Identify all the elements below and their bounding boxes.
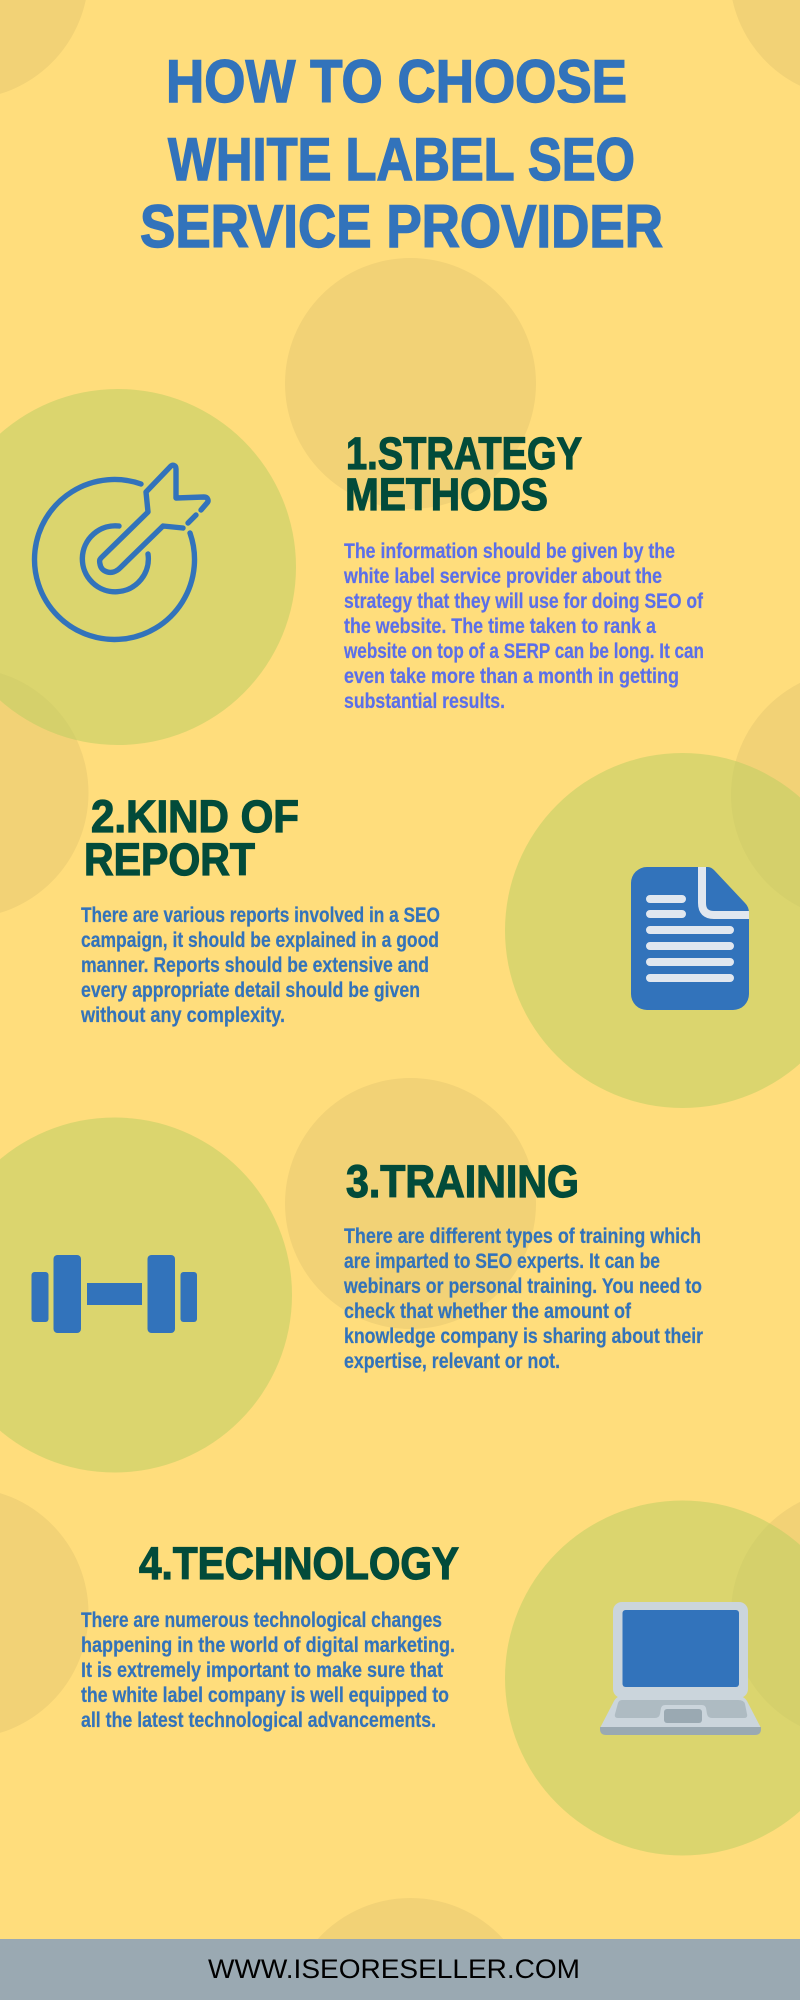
- text: strategy methods: substantial results.: [344, 690, 505, 713]
- heading: technology: 4.TECHNOLOGY: [139, 1538, 459, 1589]
- text: kind of report: There are various reports involved in a SEO: [81, 904, 440, 927]
- heading: kind of report: [84, 791, 299, 885]
- heading: kind of report: REPORT: [84, 834, 255, 885]
- text: strategy methods: The information should be given by the: [344, 540, 675, 563]
- text: training: There are different types of training which: [344, 1225, 701, 1248]
- text: strategy methods: the website. The time taken to rank a: [344, 615, 656, 638]
- heading: strategy methods: [345, 428, 582, 520]
- text: technology: happening in the world of digital marketing.: [81, 1634, 455, 1657]
- text: strategy methods: even take more than a month in getting: [344, 665, 679, 688]
- text: strategy methods: strategy that they will use for doing SEO of: [344, 590, 704, 613]
- text: training: [343, 1225, 703, 1373]
- text: kind of report: manner. Reports should be extensive and: [81, 954, 429, 977]
- text: kind of report: every appropriate detail should be given: [81, 979, 420, 1002]
- text: strategy methods: [343, 540, 704, 713]
- icon: target with arrow: [35, 465, 208, 639]
- text: training: are imparted to SEO experts. It can be: [344, 1250, 660, 1273]
- heading: training: 3.TRAINING: [346, 1156, 579, 1207]
- title: SERVICE PROVIDER: [140, 193, 663, 260]
- text: training: webinars or personal training. You need to: [343, 1275, 702, 1298]
- heading: kind of report: 2.KIND OF: [91, 791, 299, 842]
- text: training: knowledge company is sharing about their: [344, 1325, 703, 1348]
- icon: document: [631, 867, 749, 1010]
- title: [140, 48, 663, 260]
- icon: laptop: [600, 1602, 761, 1735]
- title: WHITE LABEL SEO: [168, 126, 635, 193]
- text: technology: It is extremely important to make sure that: [81, 1659, 443, 1682]
- heading: strategy methods: METHODS: [345, 469, 548, 520]
- text: technology: [81, 1609, 455, 1732]
- text: training: check that whether the amount of: [344, 1300, 632, 1323]
- text: technology: the white label company is well equipped to: [81, 1684, 449, 1707]
- text: kind of report: [80, 904, 440, 1027]
- text: strategy methods: white label service provider about the: [343, 565, 662, 588]
- text: kind of report: without any complexity.: [80, 1004, 285, 1027]
- text: kind of report: campaign, it should be explained in a good: [81, 929, 439, 952]
- title: HOW TO CHOOSE: [166, 48, 627, 115]
- text: training: expertise, relevant or not.: [344, 1350, 560, 1373]
- text: strategy methods: website on top of a SERP can be long. It can: [343, 640, 704, 663]
- footer band: [0, 1939, 800, 2000]
- text: technology: all the latest technological advancements.: [81, 1709, 436, 1732]
- footer url: WWW.ISEORESELLER.COM: [208, 1954, 580, 1984]
- heading: strategy methods: 1.STRATEGY: [346, 428, 582, 479]
- text: technology: There are numerous technological changes: [81, 1609, 442, 1632]
- icon: dumbbell: [32, 1255, 197, 1333]
